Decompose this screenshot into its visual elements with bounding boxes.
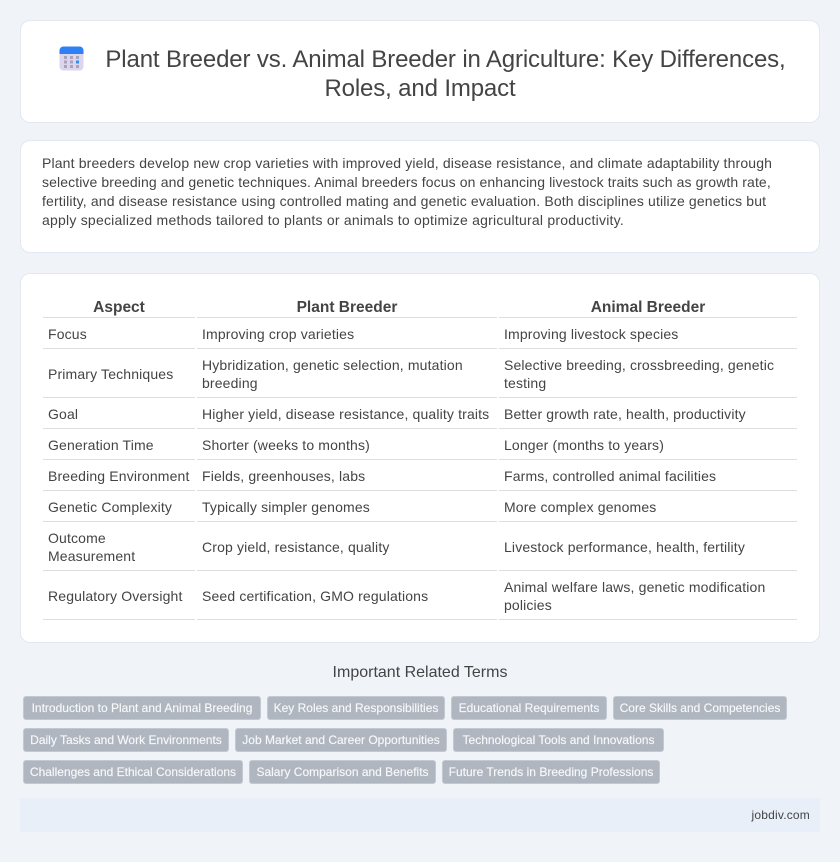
- title: Plant Breeder vs. Animal Breeder in Agriculture: Key Differences,: [105, 46, 786, 73]
- chip: [249, 760, 436, 784]
- header: Animal Breeder: Animal Breeder: [591, 299, 705, 316]
- summary text: Plant breeders develop new crop varieties with improved yield, disease resistance, and climate adaptability through: [42, 155, 772, 171]
- row: Outcome Measurement: [48, 530, 136, 564]
- row: Generation Time: Generation Time: [48, 437, 154, 453]
- comparison table: Seed certification, GMO regulations: [202, 588, 428, 604]
- row: Outcome Measurement: Outcome: [48, 530, 106, 546]
- chip: [23, 728, 229, 752]
- comparison table: More complex genomes: [504, 499, 656, 515]
- chip: Future Trends in Breeding Professions: [449, 765, 653, 779]
- footer bar: [20, 798, 820, 832]
- row: Goal: Goal: [48, 406, 78, 422]
- row: Genetic Complexity: Genetic Complexity: [48, 499, 172, 515]
- summary text: selective breeding and genetic techniques. Animal breeders focus on enhancing livestock traits such as growth rate,: [42, 174, 771, 190]
- summary text: apply specialized methods tailored to plants or animals to optimize agricultural productivity.: [42, 212, 624, 228]
- comparison table: testing: [504, 375, 546, 391]
- comparison table: Shorter (weeks to months): [202, 437, 370, 453]
- panel: title card: [20, 20, 820, 123]
- chip: [23, 760, 243, 784]
- row: Breeding Environment: Breeding Environment: [48, 468, 190, 484]
- header: Plant Breeder: Plant Breeder: [297, 299, 397, 316]
- row: Regulatory Oversight: Regulatory Oversight: [48, 588, 183, 604]
- footer: site name: jobdiv.com: [752, 808, 810, 822]
- summary text: fertility, and disease resistance using controlled mating and genetic evaluation. Both disciplines utilize genetics but: [42, 193, 766, 209]
- panel: comparison table card: [20, 273, 820, 643]
- heading: related terms: Important Related Terms: [333, 664, 507, 681]
- panel: summary card: [20, 140, 820, 253]
- chip: Educational Requirements: [459, 701, 599, 715]
- row: Focus: Focus: [48, 326, 87, 342]
- chip: Challenges and Ethical Considerations: [30, 765, 236, 779]
- comparison table: Improving crop varieties: [202, 326, 354, 342]
- comparison table: policies: [504, 597, 552, 613]
- chip: [451, 696, 607, 720]
- chip: Job Market and Career Opportunities: [242, 733, 440, 747]
- row: Outcome Measurement: Measurement: [48, 548, 135, 564]
- chip: Introduction to Plant and Animal Breeding: [32, 701, 252, 715]
- comparison table: Hybridization, genetic selection, mutation: [202, 357, 463, 373]
- comparison table: Higher yield, disease resistance, quality traits: [202, 406, 489, 422]
- chip: Salary Comparison and Benefits: [256, 765, 429, 779]
- chip: [23, 696, 261, 720]
- chip: [613, 696, 787, 720]
- comparison table: Crop yield, resistance, quality: [202, 539, 390, 555]
- comparison table: Longer (months to years): [504, 437, 664, 453]
- chip: Daily Tasks and Work Environments: [30, 733, 222, 747]
- comparison table: Farms, controlled animal facilities: [504, 468, 716, 484]
- title: Roles, and Impact: [324, 75, 516, 102]
- comparison table: Selective breeding, crossbreeding, genetic: [504, 357, 774, 373]
- chip: Technological Tools and Innovations: [463, 733, 654, 747]
- comparison table: breeding: [202, 375, 258, 391]
- chip: Key Roles and Responsibilities: [274, 701, 438, 715]
- comparison table: Better growth rate, health, productivity: [504, 406, 746, 422]
- comparison table: [43, 299, 797, 620]
- icon: calendar: [60, 46, 84, 70]
- chip: Core Skills and Competencies: [620, 701, 780, 715]
- chip: [267, 696, 445, 720]
- chip: [235, 728, 447, 752]
- comparison table: Animal welfare laws, genetic modification: [504, 579, 765, 595]
- row: Primary Techniques: Primary Techniques: [48, 366, 173, 382]
- title: [105, 46, 786, 102]
- comparison table: Fields, greenhouses, labs: [202, 468, 365, 484]
- summary text: [42, 155, 772, 228]
- header: Aspect: Aspect: [93, 299, 145, 316]
- comparison table: Typically simpler genomes: [202, 499, 370, 515]
- comparison table: Livestock performance, health, fertility: [504, 539, 745, 555]
- chip: [442, 760, 660, 784]
- term chips: [23, 696, 787, 784]
- chip: [453, 728, 664, 752]
- comparison table: Improving livestock species: [504, 326, 678, 342]
